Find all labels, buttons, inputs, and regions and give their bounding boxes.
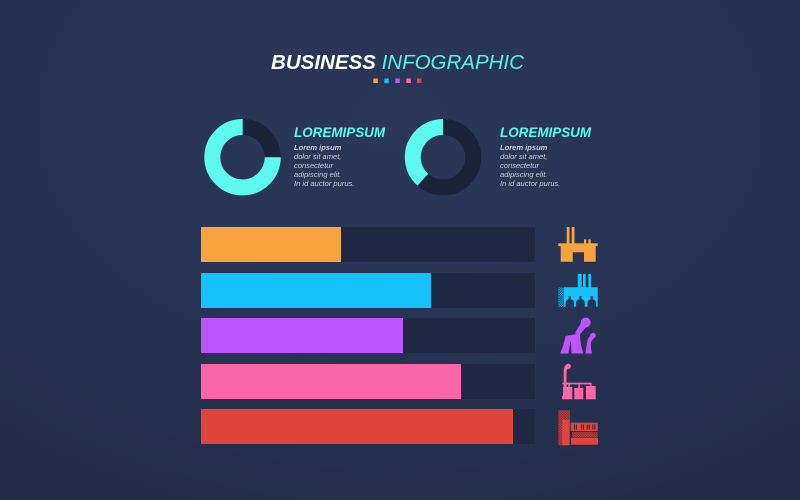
description 1: adipiscing elit. — [294, 170, 341, 179]
colour dots row — [373, 78, 422, 83]
description 2: dolor sit amet, — [500, 152, 547, 161]
heading 2: LOREMIPSUM — [500, 125, 591, 140]
icon: red factory — [558, 410, 598, 446]
description 1: In id auctor purus. — [294, 179, 354, 188]
donut chart 1 — [204, 119, 281, 196]
icon: purple smokestacks — [560, 318, 596, 354]
description 1: dolor sit amet, — [294, 152, 341, 161]
description 1 — [294, 142, 354, 188]
bar 4 pink — [201, 364, 535, 399]
icon: pink plant — [562, 364, 596, 400]
description 2: In id auctor purus. — [500, 179, 560, 188]
bar 3 purple — [201, 318, 535, 353]
bar 5 red — [201, 409, 535, 444]
icon: blue factory — [558, 274, 598, 307]
description 1: Lorem ipsum — [294, 142, 341, 152]
donut chart 2 — [404, 119, 482, 196]
text block: donut 2 — [500, 125, 592, 188]
description 2 — [500, 142, 560, 188]
bar 2 blue — [201, 273, 535, 308]
heading 1: LOREMIPSUM — [294, 125, 385, 140]
text block: donut 1 — [294, 125, 386, 188]
description 2: Lorem ipsum — [500, 142, 547, 152]
bar 1 orange — [201, 227, 535, 262]
description 1: consectetur — [294, 161, 333, 170]
description 2: consectetur — [500, 161, 539, 170]
title: BUSINESS INFOGRAPHIC — [271, 51, 524, 74]
description 2: adipiscing elit. — [500, 170, 547, 179]
icon: orange factory — [558, 227, 598, 262]
